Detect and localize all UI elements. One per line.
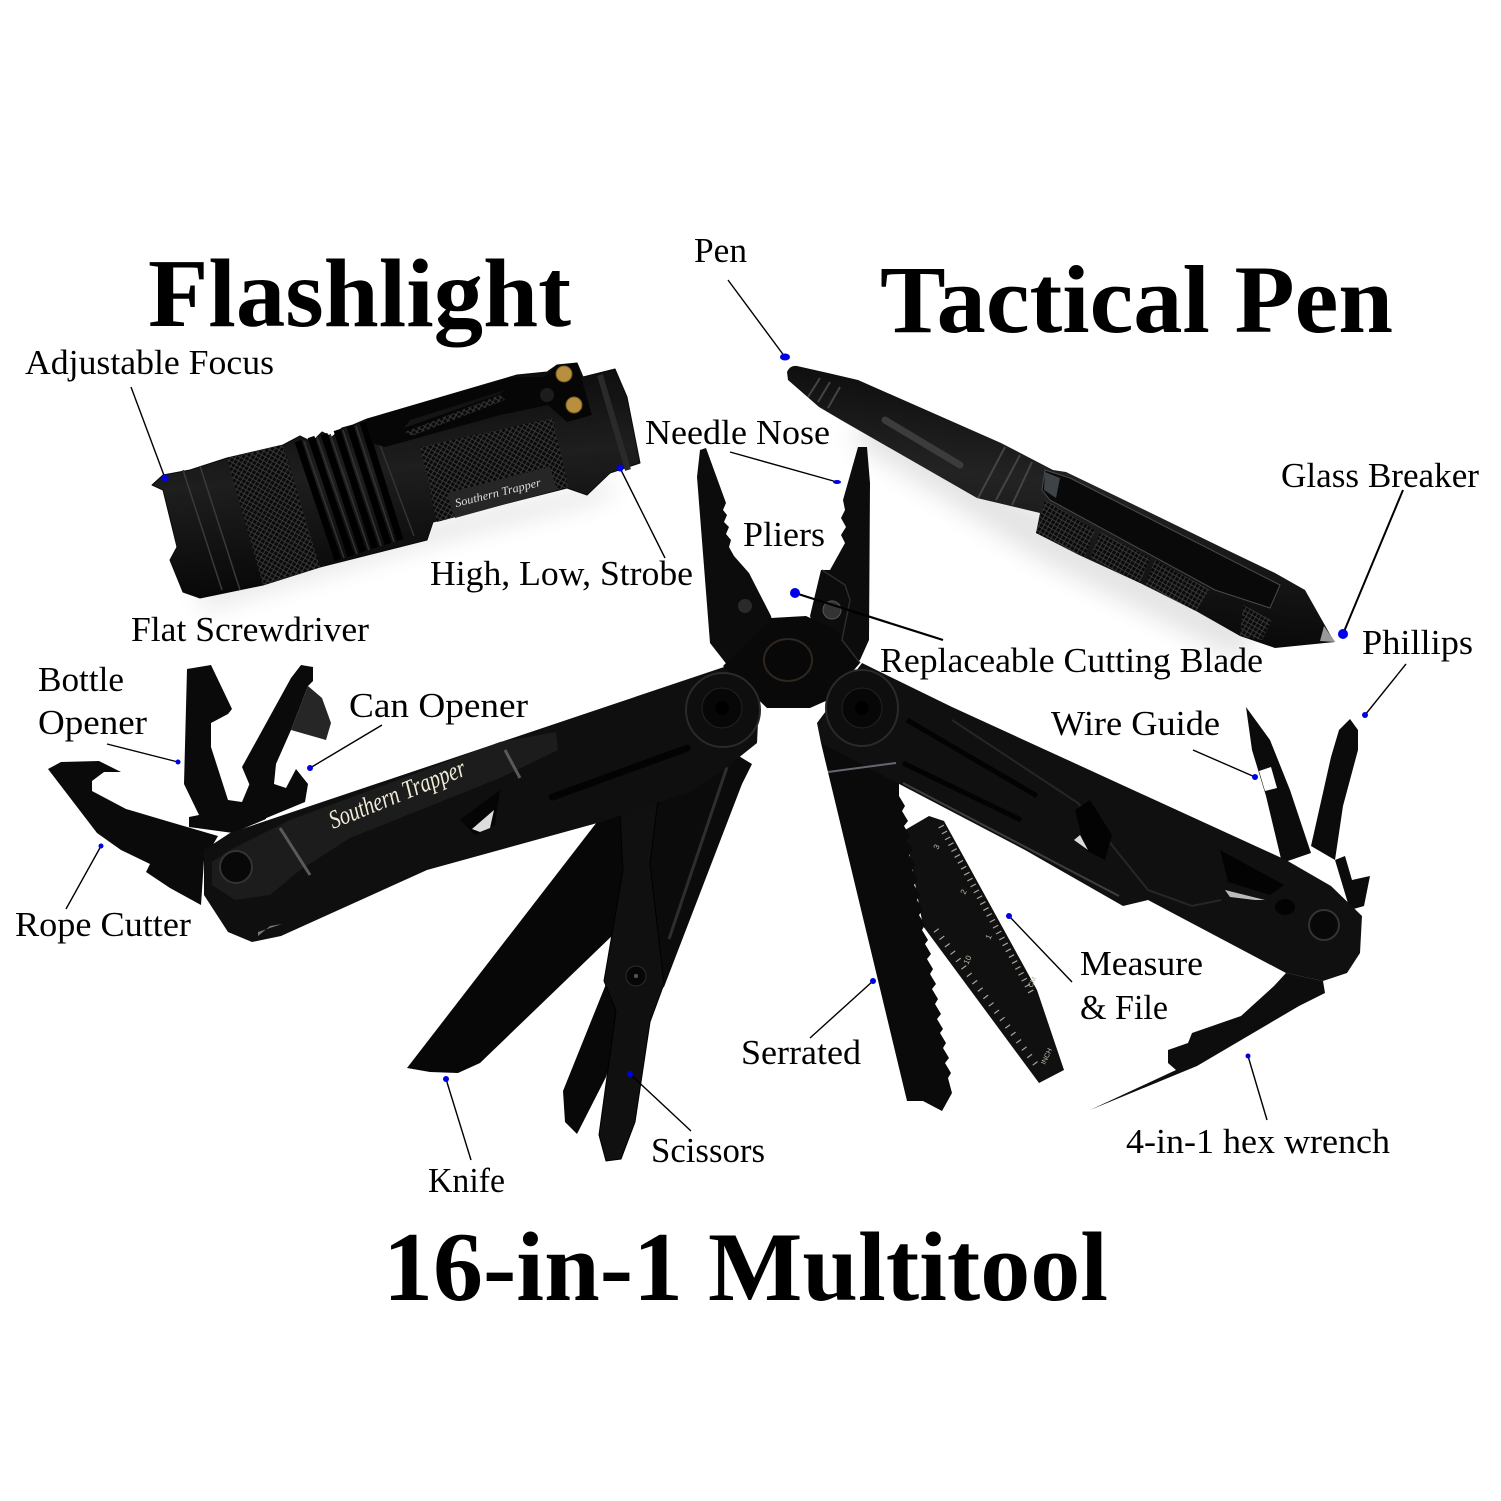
callout: Replaceable Cutting Blade: Replaceable Cutting Blade <box>880 641 1263 680</box>
heading: Flashlight: Flashlight <box>148 240 571 348</box>
ruler numbers: 3 <box>932 843 942 851</box>
tabs at right end <box>1335 856 1370 910</box>
bottle opener and flat screwdriver <box>184 665 266 833</box>
callout: Measure and File: Measure <box>1080 944 1203 983</box>
heading: Tactical Pen: Tactical Pen <box>880 246 1393 353</box>
left handle <box>204 666 760 942</box>
callout: Adjustable Focus <box>25 343 274 482</box>
right handle vents <box>1220 850 1284 895</box>
phillips driver <box>1311 719 1358 860</box>
callout: Wire Guide <box>1051 704 1258 780</box>
callout: 4-in-1 hex wrench <box>1126 1054 1391 1161</box>
right handle panel edge <box>952 720 1221 906</box>
pen barrel ridges <box>808 378 1032 505</box>
callout: Phillips: Phillips <box>1362 623 1473 662</box>
pivot plate <box>723 616 860 708</box>
label: Flat Screwdriver: Flat Screwdriver <box>131 610 369 649</box>
pivot disc left <box>686 673 760 747</box>
callout: Can Opener: Can Opener <box>349 686 528 725</box>
knife blade <box>407 791 693 1073</box>
callout: 4-in-1 hex wrench: 4-in-1 hex wrench <box>1126 1122 1391 1161</box>
rope cutter <box>48 761 218 905</box>
right end screw <box>1309 910 1339 940</box>
callout: Pen: Pen <box>694 231 747 270</box>
flashlight nameplate <box>447 467 557 518</box>
multitool <box>48 447 1370 1161</box>
callout: High, Low, Strobe: High, Low, Strobe <box>430 554 693 593</box>
flashlight clip <box>365 363 592 447</box>
ruler ticks <box>941 826 1032 994</box>
clip highlight <box>280 750 520 875</box>
callout: Scissors <box>627 1071 765 1170</box>
callout: Replaceable Cutting Blade <box>790 588 1263 680</box>
callout: Glass Breaker <box>1281 456 1479 639</box>
ruler numbers: 1 <box>984 933 994 941</box>
pen shadow <box>850 410 1260 660</box>
callout: Knife <box>428 1076 505 1200</box>
left jaw <box>697 448 780 666</box>
callout: Glass Breaker: Glass Breaker <box>1281 456 1479 495</box>
flashlight body <box>152 363 640 598</box>
clip highlight <box>1044 472 1060 498</box>
callout: Measure and File <box>1006 913 1203 1027</box>
flashlight brass screws <box>556 366 582 413</box>
can opener <box>242 665 331 819</box>
scissor blade <box>563 984 625 1134</box>
tactical pen <box>787 366 1335 660</box>
callout: Measure and File: & File <box>1080 988 1168 1027</box>
callout: Serrated: Serrated <box>741 1033 862 1072</box>
ruler numbers: INCH <box>1040 1047 1054 1066</box>
left handle slot <box>548 744 691 802</box>
callout: Wire Guide: Wire Guide <box>1051 704 1220 743</box>
left end screw <box>220 851 252 883</box>
left handle top plate <box>212 732 558 900</box>
pen clip <box>1042 470 1280 608</box>
flashlight fins <box>298 422 414 560</box>
flashlight front rings <box>183 375 628 590</box>
flashlight nameplate: Southern Trapper <box>454 477 543 510</box>
wire guide tool <box>1246 707 1311 863</box>
right handle lower plate lines <box>903 720 1037 820</box>
ruler numbers: CM <box>1027 976 1038 989</box>
callout: Bottle Opener: Opener <box>38 703 147 742</box>
callout: Can Opener <box>307 686 528 771</box>
scissor arm <box>621 723 752 1000</box>
callout: Pen <box>694 231 790 360</box>
callout: Scissors: Scissors <box>651 1131 765 1170</box>
callout: High, Low, Strobe <box>430 464 693 593</box>
hex wrench <box>1090 973 1325 1110</box>
right handle window <box>1075 800 1112 860</box>
blade outline <box>822 570 860 663</box>
callout: Adjustable Focus: Adjustable Focus <box>25 343 274 382</box>
scissor body <box>599 752 664 1161</box>
measure and file blade <box>905 816 1064 1083</box>
pen body <box>787 366 1335 648</box>
flashlight shadow <box>200 480 620 610</box>
ruler numbers <box>932 843 1054 1066</box>
callout: Needle Nose <box>645 413 841 484</box>
ruler numbers: 10 <box>962 953 974 966</box>
flashlight rear knurl <box>420 418 568 522</box>
callout: Knife: Knife <box>428 1161 505 1200</box>
heading: 16-in-1 Multitool: 16-in-1 Multitool <box>383 1213 1108 1322</box>
ruler numbers: 2 <box>959 888 969 896</box>
pen knurled grips <box>1036 500 1272 640</box>
flashlight <box>152 363 640 610</box>
callout: Needle Nose: Needle Nose <box>645 413 830 452</box>
callout: Bottle Opener: Bottle <box>38 660 124 699</box>
callout: Rope Cutter <box>15 844 191 944</box>
callout: Bottle Opener <box>38 660 180 764</box>
left handle shine strip <box>258 924 282 936</box>
serrated saw blade <box>821 743 952 1111</box>
left handle cutout <box>460 790 500 835</box>
pliers <box>697 447 870 708</box>
flashlight front knurl <box>227 445 320 585</box>
jaw rivet <box>738 599 752 613</box>
right jaw <box>810 447 870 680</box>
saw collar highlight <box>828 763 896 772</box>
callout: Serrated <box>741 978 876 1072</box>
label: Pliers: Pliers <box>743 515 825 554</box>
engraved brand: Southern Trapper <box>324 753 470 835</box>
right handle <box>817 663 1362 981</box>
callout: Phillips <box>1362 623 1473 718</box>
blade screw <box>823 601 841 619</box>
callout: Rope Cutter: Rope Cutter <box>15 905 191 944</box>
glass breaker tip <box>1320 626 1335 642</box>
pivot disc right <box>826 670 898 746</box>
